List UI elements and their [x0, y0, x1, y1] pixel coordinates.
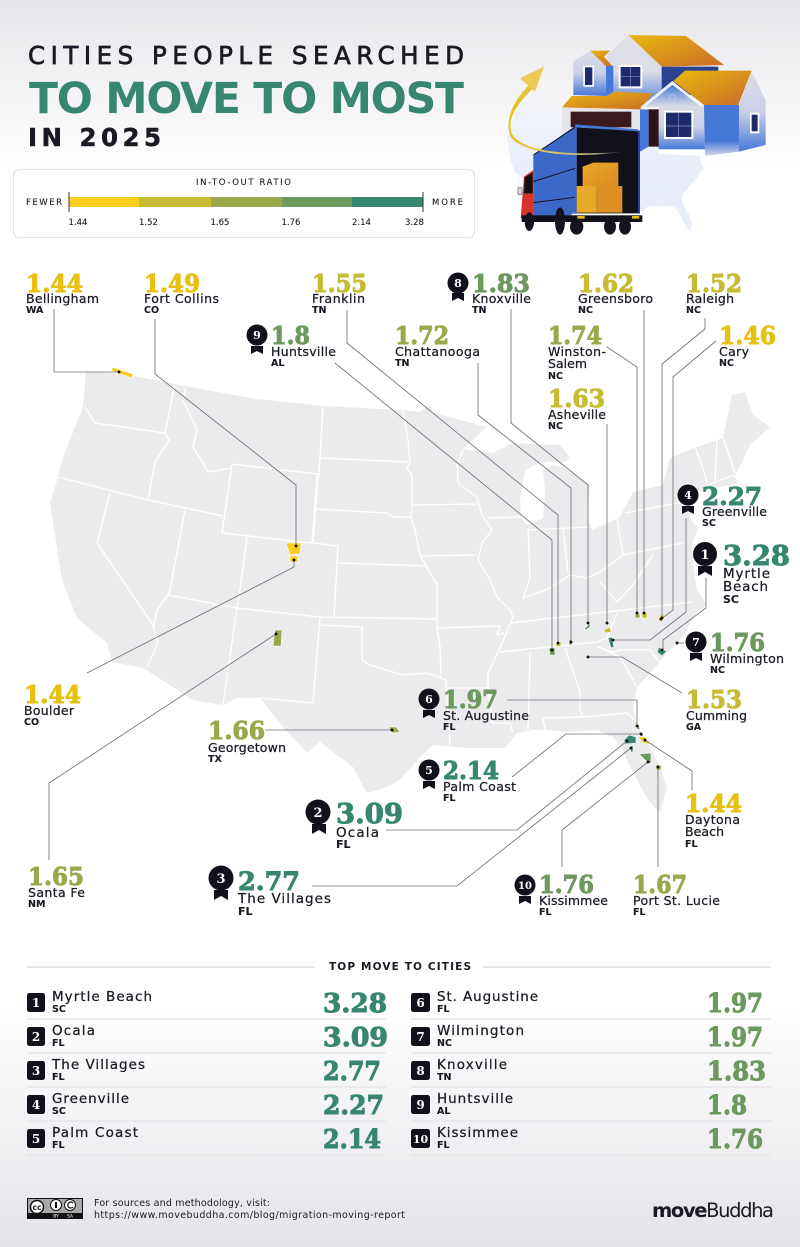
row 5 Palm Coast: 2.14: [323, 1125, 381, 1155]
row 7 Wilmington: NC: [437, 1038, 452, 1049]
label: Fort Collins: [144, 269, 219, 316]
label: Winston-Salem: Winston-: [548, 344, 606, 359]
label: Georgetown: [208, 716, 286, 765]
label: Boulder: CO: [24, 717, 39, 728]
label: Winston-Salem: [548, 321, 606, 382]
label: Kissimmee, rank 10: 10: [518, 881, 532, 892]
icon: creative commons license: cc: [33, 1203, 41, 1212]
row 1 Myrtle Beach: 1: [32, 996, 40, 1010]
map markers: city shapes: [112, 367, 667, 770]
title: TO MOVE TO MOST: [29, 75, 464, 124]
label: St. Augustine, rank 6: 1.97: [443, 685, 498, 714]
label: Kissimmee, rank 10: 1.76: [539, 870, 594, 899]
label: The Villages, rank 3: [208, 866, 331, 918]
panel: in-to-out ratio legend: 1.65: [210, 218, 229, 228]
title: [28, 41, 464, 152]
label: Kissimmee, rank 10: [514, 870, 608, 918]
footer: sources text: https://www.movebuddha.com/blog/migration-moving-report: [94, 1210, 405, 1221]
label: Cary: Cary: [719, 344, 750, 359]
label: Greenville, rank 4: SC: [702, 518, 716, 529]
row 9 Huntsville: Huntsville: [437, 1091, 513, 1107]
label: Palm Coast, rank 5: 2.14: [443, 756, 499, 785]
label: Daytona Beach: Daytona: [685, 812, 740, 827]
row 6 St. Augustine: FL: [437, 1004, 450, 1015]
row 5 Palm Coast: 5: [32, 1132, 40, 1146]
row 5 Palm Coast: [27, 1125, 386, 1155]
label: Franklin: 1.55: [312, 269, 367, 298]
label: Franklin: Franklin: [312, 291, 365, 306]
row 7 Wilmington: [411, 1023, 771, 1053]
label: Santa Fe: NM: [28, 899, 45, 910]
row 8 Knoxville: Knoxville: [437, 1057, 507, 1073]
panel: in-to-out ratio legend: [14, 170, 474, 238]
row 10 Kissimmee: FL: [437, 1140, 450, 1151]
label: St. Augustine, rank 6: [418, 685, 529, 733]
footer: sources text: For sources and methodology, visit:: [94, 1198, 270, 1209]
row 4 Greenville: Greenville: [52, 1091, 129, 1107]
row 2 Ocala: [27, 1023, 388, 1053]
label: Bellingham: WA: [26, 305, 44, 316]
panel: in-to-out ratio legend: FEWER: [26, 198, 62, 208]
label: Myrtle Beach, rank 1: SC: [723, 593, 739, 606]
label: Myrtle Beach, rank 1: Myrtle: [723, 566, 770, 582]
label: Fort Collins: Fort Collins: [144, 291, 219, 306]
row 8 Knoxville: TN: [437, 1072, 451, 1083]
label: Santa Fe: [28, 862, 85, 910]
row 1 Myrtle Beach: 3.28: [323, 989, 387, 1019]
table: top move to cities ranks 6-10: [411, 989, 771, 1155]
label: Cumming: Cumming: [686, 708, 747, 723]
panel: in-to-out ratio legend: MORE: [432, 198, 463, 208]
label: Knoxville, rank 8: [448, 269, 531, 316]
label: Bellingham: Bellingham: [26, 291, 99, 306]
row 10 Kissimmee: Kissimmee: [437, 1125, 518, 1141]
row 4 Greenville: [27, 1091, 386, 1121]
label: Wilmington, rank 7: Wilmington: [710, 651, 784, 666]
label: The Villages, rank 3: The Villages: [237, 891, 331, 907]
label: Greenville, rank 4: 2.27: [702, 482, 762, 511]
label: Wilmington, rank 7: NC: [710, 665, 725, 676]
label: Raleigh: 1.52: [686, 269, 742, 298]
label: Winston-Salem: NC: [548, 371, 563, 382]
row 6 St. Augustine: St. Augustine: [437, 989, 538, 1005]
label: Knoxville, rank 8: 8: [454, 277, 462, 290]
row 5 Palm Coast: FL: [52, 1140, 65, 1151]
label: Franklin: TN: [312, 305, 326, 316]
label: Daytona Beach: FL: [685, 839, 698, 850]
logo: moveBuddha: moveBuddha: [652, 1199, 774, 1222]
row 3 The Villages: [27, 1057, 386, 1087]
row 8 Knoxville: 8: [416, 1064, 425, 1078]
label: Ocala, rank 2: FL: [336, 838, 351, 851]
label: Fort Collins: 1.49: [144, 269, 200, 298]
label: Chattanooga: 1.72: [395, 321, 449, 350]
label: Port St. Lucie: FL: [633, 907, 646, 918]
label: St. Augustine, rank 6: 6: [425, 693, 433, 706]
label: Greensboro: 1.62: [578, 269, 634, 298]
row 1 Myrtle Beach: SC: [52, 1004, 66, 1015]
label: Fort Collins: CO: [144, 305, 159, 316]
row 7 Wilmington: 7: [416, 1030, 425, 1044]
row 10 Kissimmee: 10: [413, 1133, 428, 1146]
row 3 The Villages: 3: [32, 1064, 40, 1078]
label: Myrtle Beach, rank 1: 1: [700, 548, 710, 563]
heading: top move to cities: TOP MOVE TO CITIES: [329, 961, 471, 973]
row 6 St. Augustine: 1.97: [707, 989, 763, 1019]
row 4 Greenville: SC: [52, 1106, 66, 1117]
row 9 Huntsville: [411, 1091, 771, 1121]
label: Knoxville, rank 8: 1.83: [472, 269, 530, 298]
icon: creative commons license: BY: [53, 1214, 59, 1220]
label: Greensboro: [578, 269, 653, 316]
row 3 The Villages: The Villages: [51, 1057, 145, 1073]
label: Winston-Salem: Salem: [548, 356, 587, 371]
label: Palm Coast, rank 5: 5: [425, 764, 433, 777]
row 1 Myrtle Beach: [27, 989, 387, 1019]
label: Georgetown: Georgetown: [208, 740, 286, 755]
label: Santa Fe: 1.65: [28, 862, 84, 891]
label: Santa Fe: Santa Fe: [28, 885, 85, 900]
title: CITIES PEOPLE SEARCHED: [28, 41, 464, 70]
panel: in-to-out ratio legend: 1.76: [282, 218, 300, 228]
label: St. Augustine, rank 6: St. Augustine: [443, 708, 529, 723]
label: Kissimmee, rank 10: Kissimmee: [539, 893, 608, 908]
label: Huntsville, rank 9: 1.8: [271, 321, 310, 350]
row 2 Ocala: FL: [52, 1038, 65, 1049]
label: Greenville, rank 4: Greenville: [702, 504, 767, 519]
label: Bellingham: 1.44: [26, 269, 83, 298]
label: Georgetown: TX: [208, 754, 222, 765]
label: Palm Coast, rank 5: [418, 756, 516, 804]
row 2 Ocala: Ocala: [52, 1023, 95, 1039]
row 5 Palm Coast: Palm Coast: [52, 1125, 138, 1141]
label: Daytona Beach: [685, 789, 742, 850]
label: Asheville: NC: [548, 421, 563, 432]
label: Knoxville, rank 8: Knoxville: [472, 291, 531, 306]
row 7 Wilmington: Wilmington: [437, 1023, 524, 1039]
label: Daytona Beach: 1.44: [685, 789, 742, 818]
label: Boulder: Boulder: [24, 703, 75, 718]
label: Ocala, rank 2: 3.09: [336, 799, 403, 830]
label: Georgetown: 1.66: [208, 716, 265, 745]
label: Huntsville, rank 9: AL: [271, 358, 284, 369]
label: Port St. Lucie: [633, 870, 720, 918]
row 9 Huntsville: AL: [437, 1106, 450, 1117]
label: Wilmington, rank 7: 1.76: [710, 628, 765, 657]
map: contiguous United States: [50, 372, 770, 813]
label: Boulder: 1.44: [24, 680, 81, 709]
label: Myrtle Beach, rank 1: [693, 541, 790, 606]
label: Asheville: [548, 384, 606, 432]
label: Huntsville, rank 9: Huntsville: [271, 344, 336, 359]
label: Ocala, rank 2: Ocala: [336, 825, 379, 841]
label: Wilmington, rank 7: 7: [692, 636, 700, 649]
label: Ocala, rank 2: [306, 799, 403, 851]
footer: sources text: [94, 1198, 405, 1221]
label: Chattanooga: Chattanooga: [395, 344, 480, 359]
label: Asheville: 1.63: [548, 384, 605, 413]
label: Cumming: [686, 685, 747, 733]
label: Port St. Lucie: 1.67: [633, 870, 687, 899]
label: Myrtle Beach, rank 1: Beach: [723, 579, 768, 595]
label: Myrtle Beach, rank 1: 3.28: [723, 541, 790, 572]
label: The Villages, rank 3: 3: [216, 872, 226, 887]
row 8 Knoxville: [411, 1057, 771, 1087]
label: Palm Coast, rank 5: FL: [443, 793, 456, 804]
label: Huntsville, rank 9: 9: [253, 329, 261, 342]
icon: creative commons license: [28, 1198, 82, 1220]
label: Cumming: GA: [686, 722, 702, 733]
row 4 Greenville: 2.27: [323, 1091, 384, 1121]
label: Cary: 1.46: [719, 321, 776, 350]
label: Greenville, rank 4: [678, 482, 767, 529]
row 2 Ocala: 3.09: [323, 1023, 388, 1053]
row 3 The Villages: 2.77: [323, 1057, 381, 1087]
label: Cary: NC: [719, 358, 734, 369]
title: IN 2025: [28, 123, 161, 152]
row 2 Ocala: 2: [32, 1030, 40, 1044]
row 1 Myrtle Beach: Myrtle Beach: [52, 989, 152, 1005]
label: Cary: [719, 321, 776, 369]
table: top move to cities ranks 1-5: [27, 989, 388, 1155]
label: Cumming: 1.53: [686, 685, 742, 714]
row 3 The Villages: FL: [52, 1072, 65, 1083]
row 10 Kissimmee: 1.76: [707, 1125, 763, 1155]
row 6 St. Augustine: 6: [416, 996, 425, 1010]
label: Greensboro: NC: [578, 305, 593, 316]
row 4 Greenville: 4: [32, 1098, 40, 1112]
label: Greenville, rank 4: 4: [684, 489, 692, 502]
label: The Villages, rank 3: 2.77: [238, 867, 300, 897]
label: Raleigh: [686, 269, 742, 316]
row 6 St. Augustine: [411, 989, 771, 1019]
panel: in-to-out ratio legend: 1.44: [68, 218, 87, 228]
label: The Villages, rank 3: FL: [238, 905, 253, 918]
label: St. Augustine, rank 6: FL: [443, 722, 456, 733]
illustration: moving truck and houses over US map: [507, 35, 766, 235]
label: Wilmington, rank 7: [686, 628, 784, 676]
leader lines with city dots: [49, 309, 716, 886]
label: Franklin: [312, 269, 367, 316]
panel: in-to-out ratio legend: 3.28: [405, 218, 424, 228]
row 9 Huntsville: 9: [416, 1098, 425, 1112]
panel: in-to-out ratio legend: 1.52: [139, 218, 158, 228]
label: Raleigh: Raleigh: [686, 291, 734, 306]
label: Palm Coast, rank 5: Palm Coast: [443, 779, 516, 794]
row 10 Kissimmee: [411, 1125, 771, 1155]
label: Ocala, rank 2: 2: [313, 806, 323, 821]
label: Daytona Beach: Beach: [685, 824, 724, 839]
label: Greensboro: Greensboro: [578, 291, 653, 306]
icon: creative commons license: SA: [67, 1214, 74, 1220]
label: Asheville: Asheville: [548, 407, 606, 422]
label: Raleigh: NC: [686, 305, 701, 316]
label: Chattanooga: TN: [395, 358, 409, 369]
row 8 Knoxville: 1.83: [707, 1057, 766, 1087]
label: Knoxville, rank 8: TN: [472, 305, 486, 316]
label: Bellingham: [26, 269, 99, 316]
label: Boulder: [24, 680, 81, 728]
label: Chattanooga: [395, 321, 480, 369]
panel: in-to-out ratio legend: IN-TO-OUT RATIO: [196, 178, 291, 188]
label: Huntsville, rank 9: [246, 321, 336, 369]
label: Kissimmee, rank 10: FL: [539, 907, 552, 918]
row 7 Wilmington: 1.97: [707, 1023, 763, 1053]
label: Winston-Salem: 1.74: [548, 321, 602, 350]
label: Port St. Lucie: Port St. Lucie: [633, 893, 720, 908]
row 9 Huntsville: 1.8: [707, 1091, 747, 1121]
panel: in-to-out ratio legend: 2.14: [352, 218, 371, 228]
